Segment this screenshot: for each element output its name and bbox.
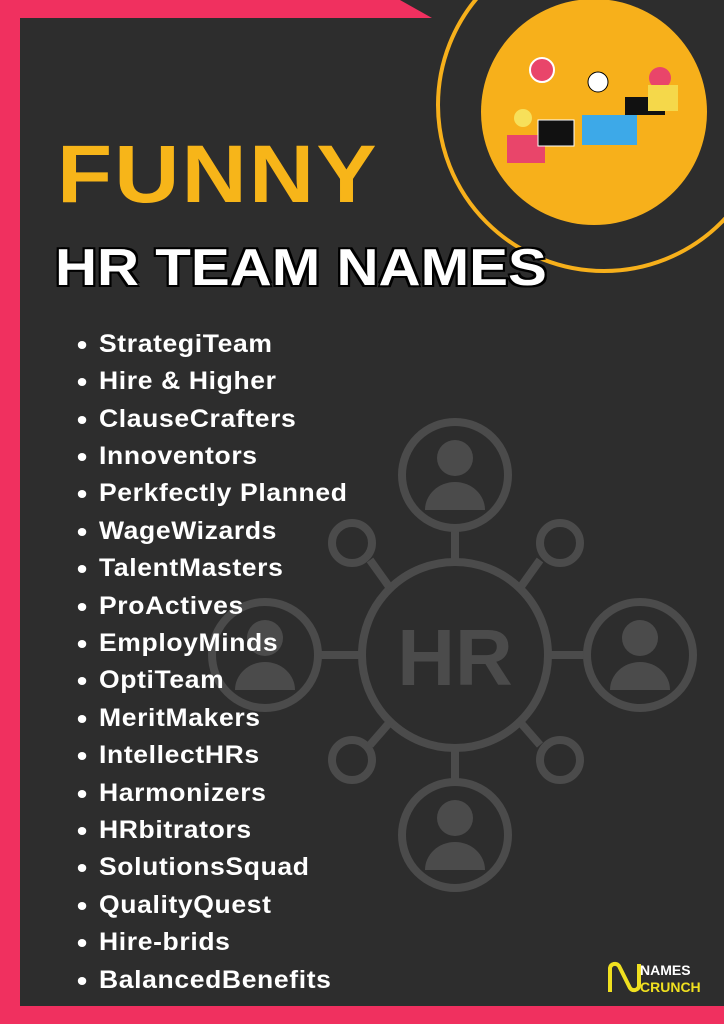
list of names: StrategiTeam: [99, 330, 273, 358]
watermark: HR network: HR: [397, 613, 513, 702]
list of names: WageWizards: [99, 517, 277, 545]
list of names: ProActives: [99, 592, 244, 620]
list of names: MeritMakers: [99, 704, 261, 732]
list of names: SolutionsSquad: [99, 853, 310, 881]
list of names: Hire & Higher: [99, 367, 277, 395]
logo: Names Crunch: CRUNCH: [640, 979, 701, 995]
list of names: OptiTeam: [99, 666, 224, 694]
list of names: Innoventors: [99, 442, 258, 470]
list of names: HRbitrators: [99, 816, 252, 844]
list of names: TalentMasters: [99, 554, 284, 582]
list of names: ClauseCrafters: [99, 405, 296, 433]
list of names: Hire-brids: [99, 928, 231, 956]
title: FUNNY: FUNNY: [57, 129, 379, 220]
list of names: BalancedBenefits: [99, 966, 332, 994]
logo: Names Crunch: NAMES: [640, 962, 691, 978]
list of names: QualityQuest: [99, 891, 272, 919]
list of names: Perkfectly Planned: [99, 479, 348, 507]
list of names: Harmonizers: [99, 779, 267, 807]
list of names: EmployMinds: [99, 629, 278, 657]
list of names: IntellectHRs: [99, 741, 260, 769]
logo: Names Crunch: [608, 962, 701, 995]
illustration: yellow circle with team: [436, 0, 724, 273]
subtitle: HR TEAM NAMES: HR TEAM NAMES: [55, 239, 547, 297]
